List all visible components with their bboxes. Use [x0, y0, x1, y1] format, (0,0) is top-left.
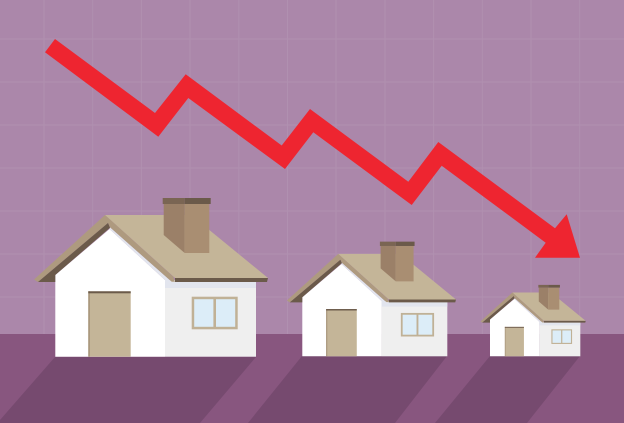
roof [34, 215, 268, 282]
large house [34, 198, 268, 357]
chimney [163, 198, 211, 253]
medium house [287, 242, 456, 356]
house shadows [0, 356, 580, 423]
door [88, 291, 131, 357]
window [192, 297, 238, 329]
side wall [165, 280, 256, 357]
background: purple wall [0, 0, 624, 335]
eave shadow [110, 227, 256, 288]
small house [480, 285, 586, 356]
ground band [0, 334, 624, 423]
arrow: red zigzag falling trend [45, 39, 580, 258]
front wall [55, 229, 165, 357]
